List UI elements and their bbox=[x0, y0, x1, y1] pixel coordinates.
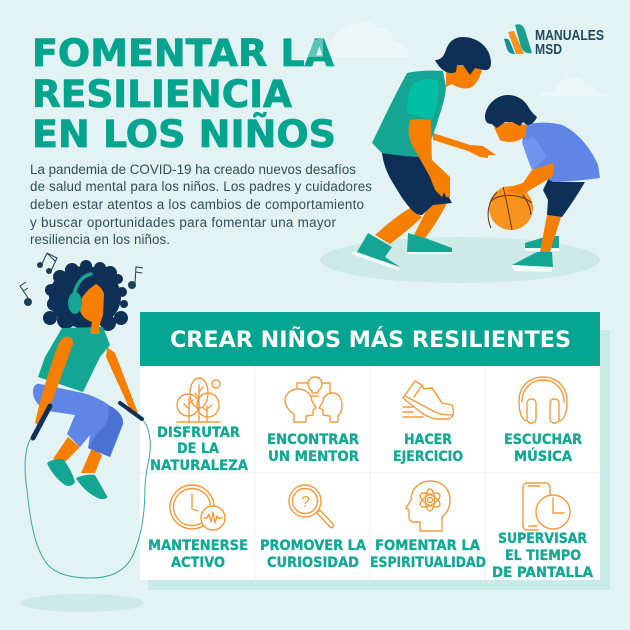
label bbox=[504, 432, 582, 465]
item: hacer ejercicio bbox=[393, 381, 463, 465]
title: FOMENTAR LA bbox=[32, 32, 334, 75]
label: DISFRUTAR bbox=[157, 425, 240, 441]
logo: Manuales MSD bbox=[504, 24, 604, 58]
panel header bbox=[140, 312, 600, 366]
item: fomentar la espiritualidad bbox=[370, 481, 486, 571]
label bbox=[148, 538, 248, 571]
icon: magnifying glass bbox=[289, 485, 334, 528]
label: SUPERVISAR bbox=[498, 531, 587, 547]
label bbox=[150, 425, 248, 474]
skipping rope bbox=[25, 420, 150, 578]
ground shadow bbox=[320, 237, 600, 283]
label: ESPIRITUALIDAD bbox=[370, 555, 486, 571]
label: ACTIVO bbox=[171, 555, 225, 571]
title: RESILIENCIA bbox=[32, 73, 292, 116]
music note: beamed bbox=[37, 253, 57, 274]
adult bbox=[351, 37, 496, 270]
panel header: CREAR NIÑOS MÁS RESILIENTES bbox=[170, 327, 571, 353]
title: EN LOS NIÑOS bbox=[32, 112, 336, 156]
headphones bbox=[68, 274, 91, 314]
label: DE LA bbox=[177, 441, 219, 457]
item: supervisar el tiempo de pantalla bbox=[492, 483, 593, 581]
icon: trees bbox=[177, 378, 220, 422]
icon: head with atom bbox=[406, 481, 450, 531]
label bbox=[393, 432, 463, 465]
child bbox=[485, 95, 600, 272]
near leg and shoes bbox=[53, 437, 80, 462]
icon: running shoe bbox=[403, 381, 453, 419]
cloud: behind title bbox=[317, 21, 410, 57]
label bbox=[492, 531, 593, 581]
icon: clock and heartbeat bbox=[170, 485, 225, 530]
label: HACER bbox=[404, 432, 452, 448]
basketball bbox=[488, 186, 533, 230]
label bbox=[267, 432, 359, 465]
label: DE PANTALLA bbox=[492, 565, 593, 581]
icon: headphones bbox=[519, 377, 567, 423]
label: ENCONTRAR bbox=[267, 432, 359, 448]
label bbox=[370, 538, 486, 571]
item: disfrutar de la naturaleza bbox=[150, 378, 248, 474]
trousers bbox=[33, 384, 123, 457]
near arm bbox=[35, 336, 73, 427]
item: promover la curiosidad bbox=[260, 485, 366, 571]
intro text block: resiliencia en los niños. bbox=[30, 232, 170, 247]
illustration: girl jumping rope with headphones bbox=[20, 253, 150, 612]
music note: left bbox=[20, 282, 32, 306]
cloud: near logo bbox=[539, 78, 609, 96]
neck and face bbox=[80, 284, 104, 334]
intro text block: de salud mental para los niños. Los padres y cuidadores bbox=[30, 179, 372, 194]
intro text block: La pandemia de COVID-19 ha creado nuevos desafíos bbox=[30, 162, 356, 177]
label: CURIOSIDAD bbox=[267, 555, 359, 571]
icon: heads and lightbulb bbox=[285, 377, 342, 422]
label: MÚSICA bbox=[514, 447, 572, 465]
panel shadow bbox=[148, 330, 610, 590]
label: NATURALEZA bbox=[150, 458, 248, 474]
shirt bbox=[38, 327, 110, 392]
panel body bbox=[140, 366, 600, 580]
item: encontrar un mentor bbox=[267, 377, 359, 465]
label: UN MENTOR bbox=[268, 449, 359, 465]
icon glyph: question mark: ? bbox=[301, 494, 310, 511]
illustration: adult and child playing basketball bbox=[320, 37, 600, 283]
label: MANTENERSE bbox=[148, 538, 248, 554]
cloud highlight across title letter bbox=[297, 38, 323, 57]
label bbox=[260, 538, 366, 571]
ground shadow bbox=[20, 594, 144, 612]
label: FOMENTAR LA bbox=[375, 538, 480, 554]
logo: Manuales MSD: MSD bbox=[535, 42, 562, 58]
hair bbox=[43, 260, 128, 331]
label: PROMOVER LA bbox=[260, 538, 366, 554]
label: EJERCICIO bbox=[393, 449, 463, 465]
item: escuchar música bbox=[504, 377, 582, 465]
music note: right bbox=[128, 267, 143, 289]
label: EL TIEMPO bbox=[505, 548, 581, 564]
skipping rope handles bbox=[33, 406, 50, 438]
intro text block: y buscar oportunidades para fomentar una mayor bbox=[30, 215, 337, 230]
item: mantenerse activo bbox=[148, 485, 248, 571]
far arm bbox=[106, 347, 138, 414]
label: ESCUCHAR bbox=[504, 432, 582, 448]
title bbox=[32, 32, 336, 156]
panel: crear niños más resilientes bbox=[140, 312, 610, 590]
intro text block: deben estar atentos a los cambios de comportamiento bbox=[30, 197, 364, 212]
logo: Manuales MSD: MANUALES bbox=[535, 28, 604, 44]
icon: phone and clock bbox=[523, 483, 570, 530]
intro text block bbox=[30, 162, 372, 247]
